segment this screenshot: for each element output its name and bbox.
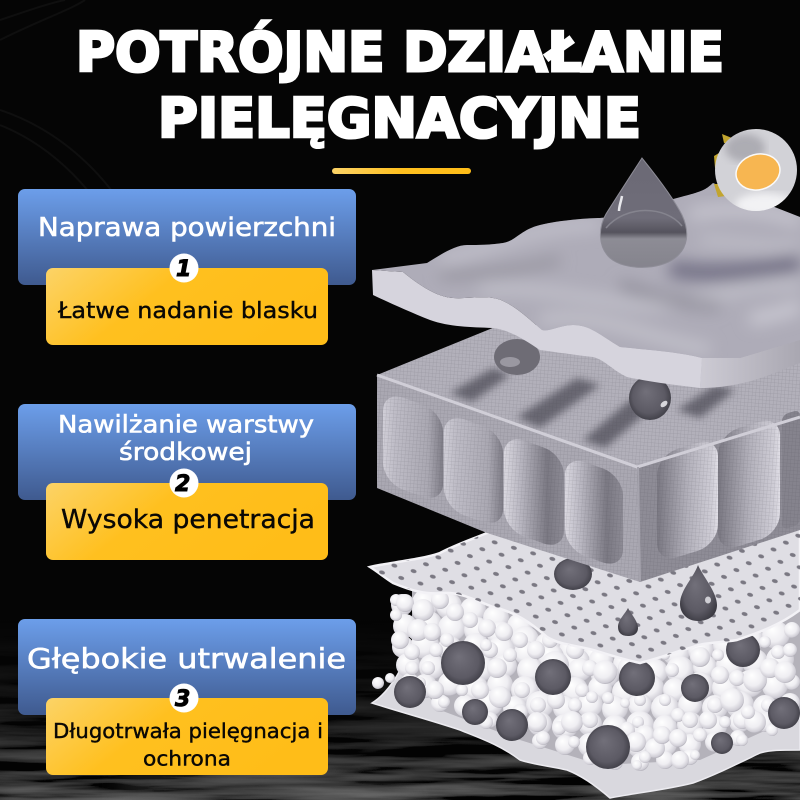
- number badge 1: [170, 254, 198, 282]
- front edge of sheet: [372, 270, 702, 388]
- yellow text 3: ochrona: [143, 746, 231, 770]
- title: PIELĘGNACYJNE: [158, 87, 641, 150]
- heading 2: Nawilżanie warstwy: [58, 410, 314, 438]
- water drop under mattress: [554, 558, 592, 590]
- corner seams: [377, 375, 800, 467]
- title: [76, 21, 724, 150]
- heading 2: środkowej: [119, 438, 252, 466]
- fabric layers illustration: [370, 129, 800, 798]
- number badge 2: [170, 468, 198, 498]
- yellow text 1: Łatwe nadanie blasku: [57, 299, 318, 324]
- blue heading box 1: [18, 189, 356, 285]
- water drop on perforated sheet: [618, 565, 717, 636]
- bottom sheet: [372, 640, 800, 798]
- perforated sheet: [370, 480, 800, 663]
- front pillows: [383, 391, 443, 504]
- heading 3: Głębokie utrwalenie: [27, 642, 346, 675]
- title: POTRÓJNE DZIAŁANIE: [76, 21, 724, 84]
- yellow box 3: [46, 698, 328, 775]
- dark water spheres: [394, 633, 800, 769]
- wavy top sheet: [372, 183, 800, 388]
- heading 1: Naprawa powierzchni: [38, 213, 336, 243]
- panel 3: deep fixation: [18, 619, 356, 775]
- sheet folds shading: [440, 210, 800, 350]
- heading 2: [58, 410, 314, 466]
- mattress layer: [377, 325, 800, 582]
- top surface: [372, 183, 800, 358]
- yellow text 3: [53, 719, 323, 770]
- water drops under top sheet: [494, 339, 671, 420]
- number badge 3: [170, 684, 198, 712]
- foam beads: [372, 560, 800, 771]
- top face: [377, 325, 800, 467]
- yellow box 1: [46, 268, 328, 345]
- mesh texture: [377, 325, 800, 582]
- big water drop: [600, 158, 687, 267]
- front left face: [377, 375, 640, 582]
- panel 2: middle layer hydration: [18, 404, 356, 560]
- top creases: [450, 368, 735, 448]
- number badge 2: 2: [175, 472, 190, 497]
- yellow text 3: Długotrwała pielęgnacja i: [53, 719, 323, 743]
- front right face: [637, 417, 800, 582]
- blue heading box 3: [18, 619, 356, 715]
- number badge 1: 1: [176, 257, 191, 282]
- yellow text 2: Wysoka penetracja: [61, 505, 315, 535]
- number badge 3: 3: [175, 687, 190, 712]
- title underline: [332, 168, 471, 174]
- panel 1: surface repair: [18, 189, 356, 345]
- yellow box 2: [46, 483, 328, 560]
- blue heading box 2: [18, 404, 356, 500]
- citrus globe icon: [714, 129, 797, 217]
